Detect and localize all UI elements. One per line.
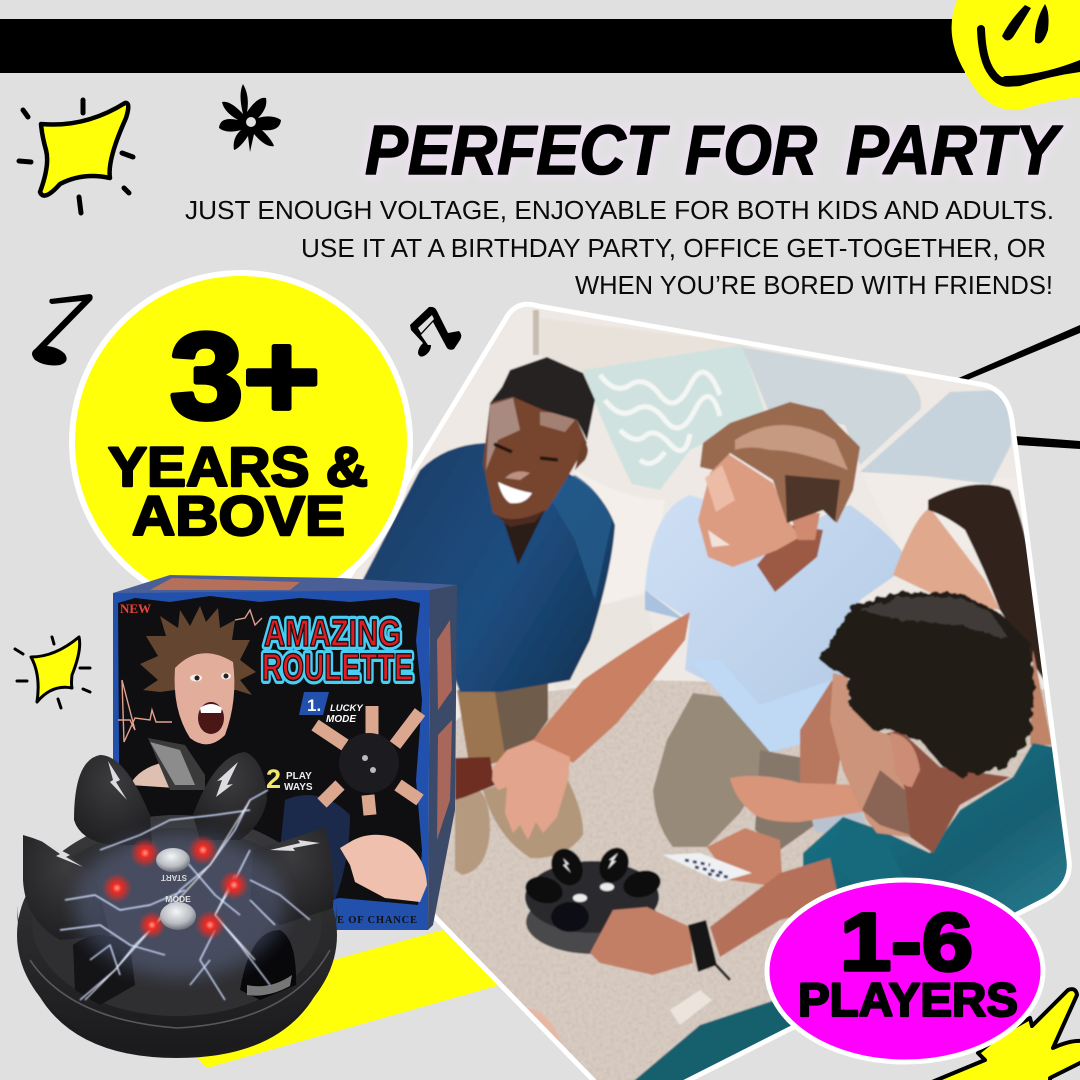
- box: small labels: E OF CHANCE: [337, 915, 417, 926]
- photo: wall and sofa: [352, 307, 1044, 720]
- box: title AMAZING ROULETTE: ROULETTE: [262, 647, 413, 689]
- badge: 1-6 players: 1-6: [840, 897, 973, 988]
- decorative strokes right: [954, 325, 1080, 449]
- product: buttons: START: [161, 873, 187, 882]
- title: PARTY: [846, 111, 1063, 189]
- box: small labels: WAYS: [284, 782, 313, 793]
- product: base: [17, 900, 337, 1058]
- photo: man in light-blue shirt: [492, 402, 910, 850]
- box: title AMAZING ROULETTE: ROULETTE: [262, 647, 413, 689]
- icon: yellow sparkle top left: [19, 100, 133, 213]
- subtitle text block: WHEN YOU’RE BORED WITH FRIENDS!: [575, 270, 1053, 300]
- photo: man in teal shirt: [630, 592, 1075, 1080]
- photo: knee at bottom edge: [527, 1008, 562, 1045]
- photo: carpet: [428, 680, 1052, 1080]
- icon: flower doodle: [219, 84, 281, 152]
- product: buttons: MODE: [165, 894, 191, 904]
- product: lightning: [60, 790, 310, 1000]
- subtitle text block: USE IT AT A BIRTHDAY PARTY, OFFICE GET-TOGETHER, OR: [301, 233, 1046, 263]
- badge: 3+ years and above: 3+: [170, 308, 320, 444]
- title: PARTY: [846, 111, 1063, 189]
- box: small labels: PLAY: [286, 771, 312, 782]
- product: bolt marks: [37, 761, 320, 867]
- photo: man in navy shirt: [360, 357, 615, 875]
- box: pointing hand: [340, 835, 427, 902]
- title: FOR: [685, 111, 817, 189]
- icon: yellow smiley blob: [952, 0, 1080, 110]
- box: small labels: LUCKY: [330, 703, 364, 714]
- product: finger slots: [23, 752, 333, 1005]
- badge: 1-6 players: [767, 880, 1043, 1062]
- product: buttons: [156, 848, 196, 930]
- icon: yellow burst bottom right: [930, 989, 1080, 1080]
- yellow strip behind product: [150, 930, 500, 1068]
- badge: 3+ years and above: YEARS &: [108, 435, 368, 498]
- product box: Amazing Roulette: [113, 575, 457, 930]
- panel: party photo: [330, 295, 1080, 1080]
- title: PERFECT: [365, 111, 670, 189]
- photo: man's arm and hand with bracelet: [590, 858, 840, 980]
- box: heartbeat line: [118, 610, 262, 742]
- box: small labels: 1.: [307, 696, 321, 715]
- box: small labels: 2: [266, 764, 281, 794]
- photo: grey cushions: [742, 347, 1011, 484]
- badge: 1-6 players: PLAYERS: [798, 973, 1018, 1026]
- icon: squiggle Z doodle: [32, 294, 93, 365]
- subtitle text block: [185, 195, 1054, 300]
- box: title AMAZING ROULETTE: AMAZING: [264, 613, 401, 655]
- title: FOR: [685, 111, 817, 189]
- icon: small yellow sparkle: [15, 637, 90, 708]
- photo: small roulette game: [522, 843, 664, 954]
- photo: knee and arm behind: [707, 680, 870, 885]
- product: roulette finger shocker: [17, 752, 337, 1058]
- product: red LEDs: [102, 835, 249, 940]
- top black bar: [0, 19, 965, 73]
- photo: woman with dark hair: [893, 484, 1052, 745]
- box: boy with spiky hair: [130, 606, 256, 790]
- photo: playing cards: [663, 853, 752, 1025]
- badge: 3+ years and above: [72, 273, 410, 611]
- box: small labels: NEW: [120, 601, 151, 616]
- box: small labels: [120, 601, 417, 926]
- photo: patterned cushion: [583, 345, 765, 490]
- icon: music note doodle: [410, 307, 461, 357]
- box: title AMAZING ROULETTE: AMAZING: [264, 613, 401, 655]
- box: small labels: MODE: [326, 714, 356, 725]
- title: [365, 111, 1063, 189]
- subtitle text block: JUST ENOUGH VOLTAGE, ENJOYABLE FOR BOTH KIDS AND ADULTS.: [185, 195, 1054, 225]
- title: PERFECT: [365, 111, 670, 189]
- badge: 3+ years and above: ABOVE: [132, 484, 345, 547]
- box: title AMAZING ROULETTE: [262, 613, 413, 689]
